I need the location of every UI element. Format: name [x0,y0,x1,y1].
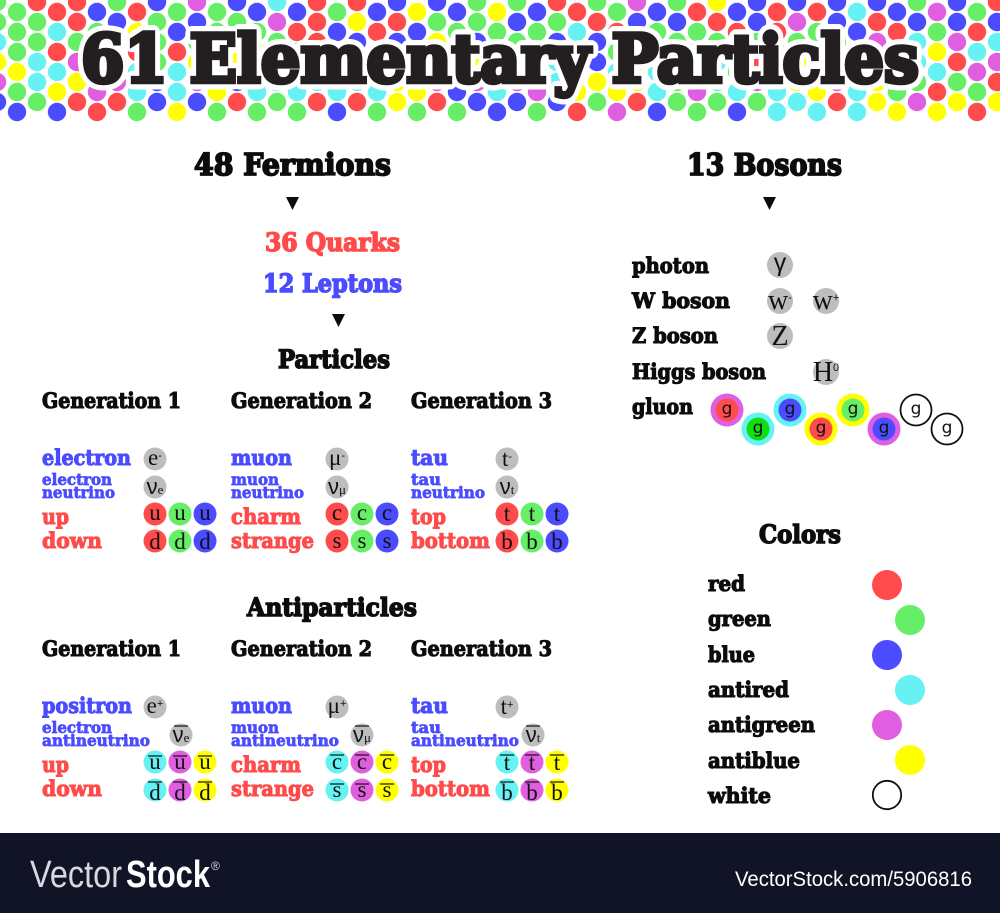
row: tau antineutrino [411,718,544,750]
row: anti bottom: b [551,780,563,805]
legend: antiblue [708,745,925,775]
row: anti down: d [174,780,186,805]
row: down: d [174,529,186,554]
row: anti top [411,750,568,777]
row: muon: μ [329,445,341,470]
row: tau antineutrino: antineutrino [411,731,519,750]
legend: red [708,570,902,600]
row: w boson: w [813,285,833,316]
row: anti charm: charm [231,752,301,777]
heading: 36 quarks: 36 Quarks [265,228,400,257]
column: particles generation 1 [42,388,216,554]
row: tau neutrino [411,470,518,502]
row: gluon: g [785,399,795,419]
row: electron: e [148,445,158,470]
panel: bosons [631,148,962,446]
row: up [42,500,216,529]
heading: 13 bosons: 13 Bosons [687,148,842,183]
row: up: up [42,504,69,529]
row: electron antineutrino [42,718,192,750]
row: anti tau: t [501,694,507,719]
row: strange: s [358,528,367,553]
row: muon antineutrino [231,718,374,750]
row: anti up [42,749,216,777]
row: anti bottom: b [526,780,538,805]
row: anti muon: μ [328,693,340,718]
row: anti up: up [42,752,69,777]
title: 61 Elementary Particles [81,20,919,98]
row: muon neutrino: neutrino [231,483,304,502]
row: charm: charm [231,504,301,529]
row: gluon: g [879,418,889,438]
legend: white: white [707,783,771,808]
row: electron: - [158,450,162,462]
row: electron: electron [42,445,131,470]
row: gluon: g [722,399,732,419]
row: electron neutrino: neutrino [42,483,115,502]
row: anti strange: strange [231,776,314,801]
legend: antired: antired [708,677,789,702]
legend: blue [708,640,902,670]
column: particles generation 3 [411,388,568,554]
row: down: down [42,528,102,553]
row: anti bottom [411,776,568,805]
row: top: t [504,501,511,526]
row: muon: muon [231,445,292,470]
legend: blue: blue [708,642,755,667]
row: muon neutrino [231,470,348,502]
row: anti down: d [149,780,161,805]
column: antiparticles generation 3 [411,636,568,805]
row: anti tau [411,693,518,719]
row: w boson: w [768,285,788,316]
column: antiparticles generation 1 [42,636,216,805]
row: muon: - [341,450,345,462]
row: tau antineutrino: νt [526,722,541,747]
row: anti top: top [411,752,446,777]
row: top [411,501,568,529]
row: anti down: d [199,780,211,805]
legend: white [707,781,901,809]
row: gluon: g [753,418,763,438]
row: photon [632,249,793,278]
row: top: t [554,501,561,526]
row: electron antineutrino: electron [42,718,112,737]
row: strange [231,528,398,553]
row: gluon: g [816,418,826,438]
row: anti strange: s [383,777,392,802]
footer logo: Vector [30,854,122,896]
row: w boson [631,285,839,316]
arrow: fermions down [286,197,299,210]
legend: red: red [708,571,745,596]
header dot pattern [0,0,1000,121]
heading: generation 3: Generation 3 [411,388,552,413]
row: charm: c [357,500,367,525]
row: tau antineutrino: tau [411,718,441,737]
legend: antired [708,675,925,705]
legend: antiblue: antiblue [708,748,800,773]
row: bottom [411,528,568,554]
row: bottom: b [551,529,563,554]
row: anti top: t [529,750,536,775]
row: anti tau: tau [411,693,448,718]
row: tau: tau [411,445,448,470]
row: z boson: Z [771,321,789,352]
row: muon antineutrino: muon [231,718,279,737]
legend: antigreen [708,710,902,740]
arrow: leptons down [332,314,345,327]
row: charm: c [382,500,392,525]
row: tau neutrino: tau [411,470,441,489]
row: positron: + [157,698,163,710]
legend: antigreen: antigreen [708,712,815,737]
footer image id: VectorStock.com/5906816 [735,868,972,891]
legend: green: green [708,606,771,631]
row: tau neutrino: νt [500,474,515,499]
row: anti charm: c [357,749,367,774]
row: muon neutrino: νμ [328,474,346,499]
row: bottom: b [501,529,513,554]
row: bottom: bottom [411,528,490,553]
row: gluon: g [911,399,921,419]
row: down: d [149,529,161,554]
heading: generation 1: Generation 1 [42,388,181,413]
row: electron antineutrino: νe [173,722,190,747]
heading: generation 2: Generation 2 [231,636,372,661]
heading: 48 fermions: 48 Fermions [194,148,391,183]
row: higgs boson: Higgs boson [632,359,766,384]
row: tau: - [508,451,512,463]
row: electron neutrino [42,470,166,502]
row: bottom: b [526,529,538,554]
row: higgs boson [632,357,839,388]
row: anti charm [231,749,398,777]
row: charm: c [332,500,342,525]
title: 61 Elementary Particles [81,20,919,98]
row: gluon: g [848,399,858,419]
heading: antiparticles: Antiparticles [246,593,417,622]
row: gluon [632,394,962,446]
footer logo: ® [211,859,220,873]
row: anti strange: s [333,777,342,802]
row: gluon: g [942,418,952,438]
row: anti bottom: bottom [411,776,490,801]
row: anti up: u [199,749,211,774]
row: anti up: u [149,749,161,774]
arrow: bosons down [763,197,776,210]
column: particles generation 2 [231,388,398,553]
row: muon neutrino: muon [231,470,279,489]
row: strange: strange [231,528,314,553]
row: anti charm: c [332,749,342,774]
row: anti strange: s [358,777,367,802]
row: anti bottom: b [501,780,513,805]
heading: generation 1: Generation 1 [42,636,181,661]
row: anti muon [231,693,348,718]
row: anti strange [231,776,398,802]
row: strange: s [383,528,392,553]
row: gluon: gluon [632,394,693,419]
row: charm [231,500,398,529]
panel: fermions [42,148,568,805]
row: muon [231,445,348,470]
row: anti top: t [504,750,511,775]
row: w boson: - [788,292,792,304]
row: photon: photon [632,253,709,278]
row: z boson: Z boson [632,323,718,348]
row: positron: positron [42,693,132,718]
row: anti charm: c [382,749,392,774]
row: anti top: t [554,750,561,775]
row: anti tau: + [507,699,513,711]
row: higgs boson: 0 [833,362,839,374]
row: electron neutrino: νe [147,474,164,499]
column: antiparticles generation 2 [231,636,398,802]
row: tau [411,445,518,471]
footer logo: Stock [126,854,211,896]
row: anti down: down [42,776,102,801]
row: tau: t [502,446,508,471]
row: top: t [529,501,536,526]
heading: generation 2: Generation 2 [231,388,372,413]
row: anti down [42,776,216,805]
row: muon antineutrino: antineutrino [231,731,339,750]
row: anti up: u [174,749,186,774]
row: tau neutrino: neutrino [411,483,485,502]
row: top: top [411,504,446,529]
legend: green [708,605,925,635]
heading: colors: Colors [759,520,841,549]
row: w boson: W boson [631,288,730,313]
row: positron: e [147,693,157,718]
row: up: u [174,500,186,525]
footer logo [30,854,220,896]
row: electron antineutrino: antineutrino [42,731,150,750]
row: anti muon: + [340,698,346,710]
row: muon antineutrino: νμ [353,722,371,747]
panel: particles [42,345,568,554]
heading: particles: Particles [278,345,390,374]
row: down [42,528,216,554]
heading: 12 leptons: 12 Leptons [263,269,402,298]
row: anti muon: muon [231,693,292,718]
row: w boson: + [833,292,839,304]
row: electron neutrino: electron [42,470,112,489]
row: higgs boson: H [813,357,833,388]
row: z boson [632,321,793,352]
row: up: u [149,500,161,525]
row: down: d [199,529,211,554]
row: photon: γ [774,249,787,277]
panel: colors legend [707,520,925,809]
panel: antiparticles [42,593,568,805]
row: strange: s [333,528,342,553]
heading: generation 3: Generation 3 [411,636,552,661]
footer bar [0,833,1000,913]
row: up: u [199,500,211,525]
